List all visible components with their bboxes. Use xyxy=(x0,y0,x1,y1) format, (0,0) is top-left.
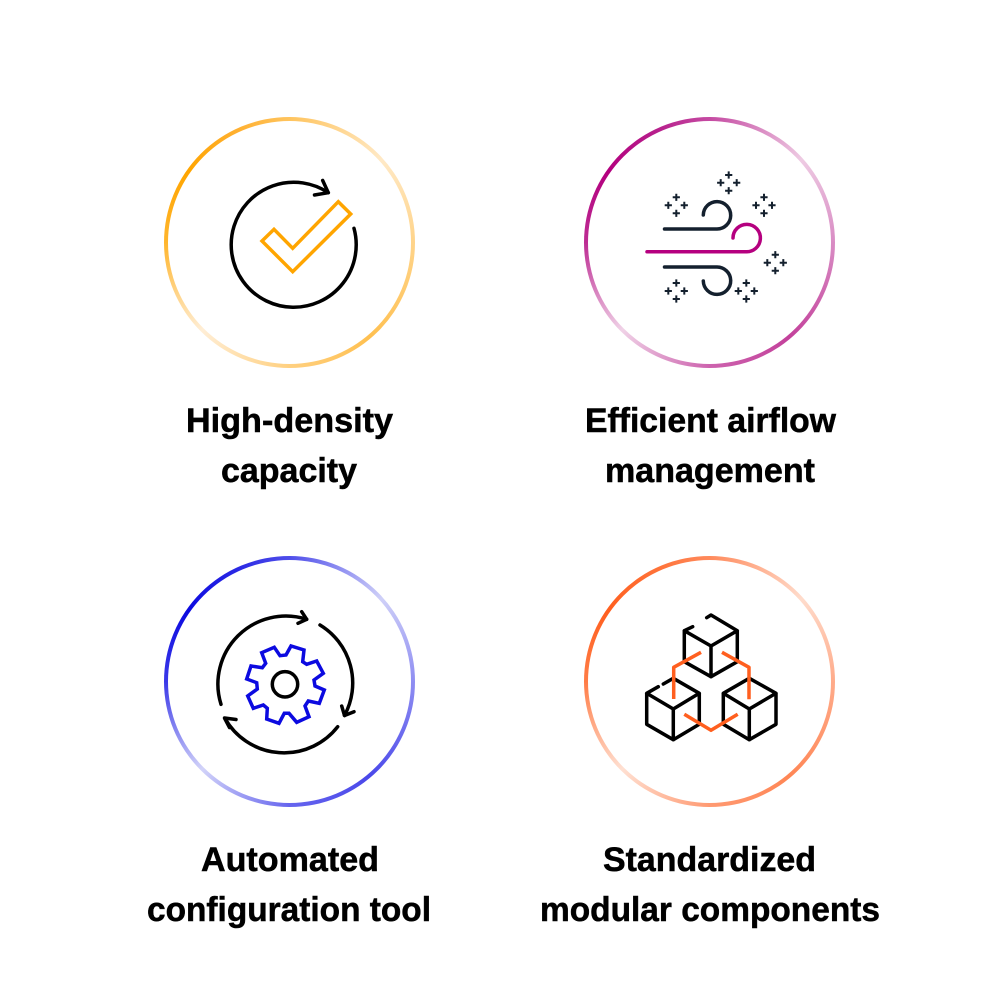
cycle arrows xyxy=(218,612,354,753)
heading: Efficient airflow management: Efficient airflow xyxy=(585,402,837,440)
icon: connected cubes xyxy=(644,613,778,742)
heading: Automated configuration tool: Automated xyxy=(201,841,379,879)
wind curl top xyxy=(664,202,731,229)
heading: Standardized modular components xyxy=(540,841,880,929)
ring: blue gradient circle xyxy=(164,556,415,807)
checkmark xyxy=(262,202,351,272)
icon: checkmark with circular arrow xyxy=(229,178,358,309)
panel: standardized modular components xyxy=(540,556,880,929)
panel: high-density capacity xyxy=(164,117,415,490)
top cube xyxy=(684,615,737,677)
panel: efficient airflow management xyxy=(584,117,837,490)
circular arrow xyxy=(231,180,356,307)
heading: Efficient airflow management xyxy=(585,402,837,490)
particle clusters xyxy=(665,171,787,303)
heading: High-density capacity xyxy=(186,402,394,490)
heading: Standardized modular components: Standardized xyxy=(603,841,816,879)
icon: gear with cycle arrows xyxy=(216,610,356,755)
ring: orange gradient circle xyxy=(584,556,835,807)
ring: amber gradient circle xyxy=(164,117,415,368)
heading: High-density capacity: High-density xyxy=(186,402,393,440)
heading: Standardized modular components: modular components xyxy=(540,891,880,929)
heading: High-density capacity: capacity xyxy=(221,452,357,490)
wind curl bottom xyxy=(664,267,731,294)
icon: wind and particles xyxy=(645,171,787,303)
heading: Automated configuration tool xyxy=(147,841,431,929)
orange connectors xyxy=(674,652,749,730)
panel: automated configuration tool xyxy=(147,556,431,929)
heading: Automated configuration tool: configuration tool xyxy=(147,891,431,929)
left cube xyxy=(647,678,699,740)
right cube xyxy=(723,678,776,740)
wind curl middle xyxy=(647,224,760,252)
gear xyxy=(247,646,324,723)
heading: Efficient airflow management: management xyxy=(605,452,815,490)
gear hub xyxy=(272,672,298,697)
ring: magenta gradient circle xyxy=(584,116,835,368)
